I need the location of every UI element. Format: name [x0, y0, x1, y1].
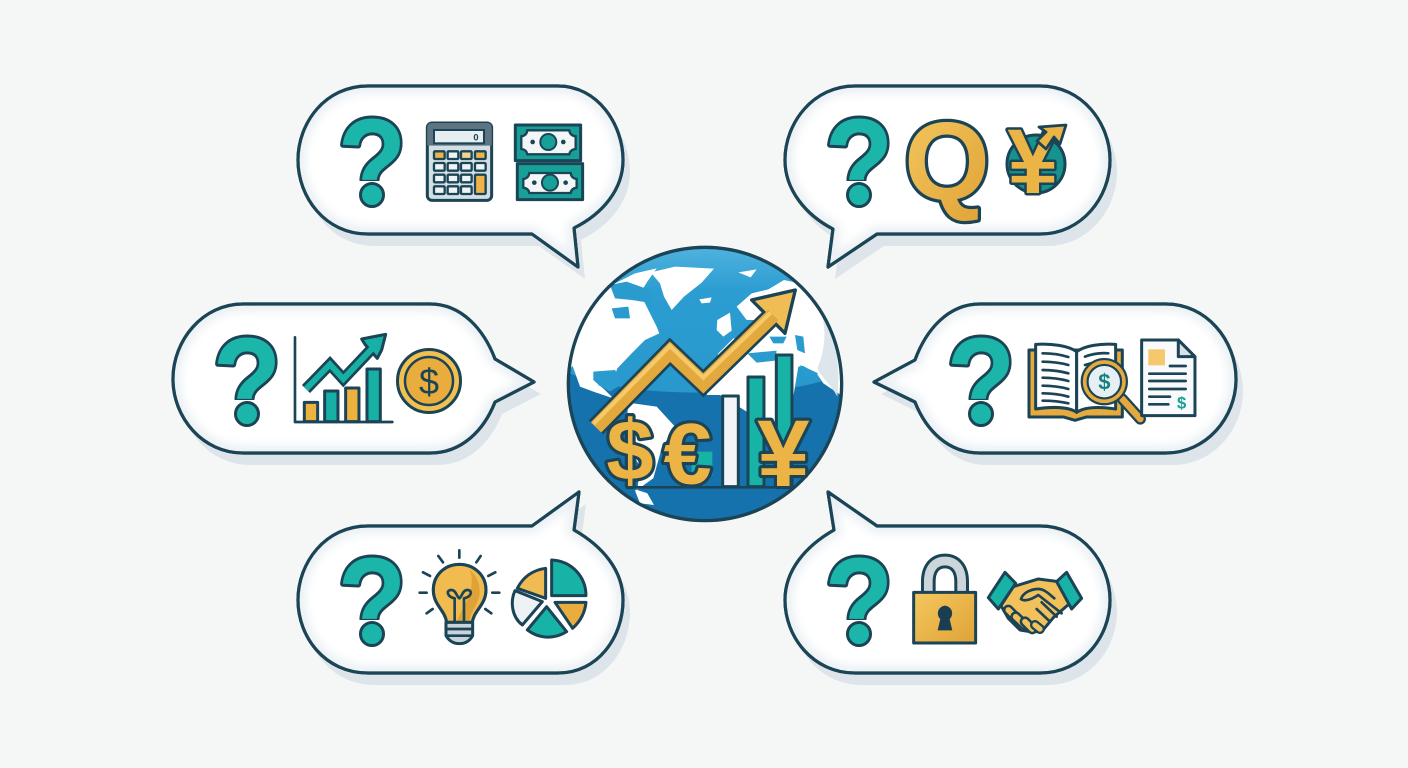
icon: magnifying glass with dollar [1085, 362, 1140, 419]
icon: open book [1029, 344, 1122, 420]
question mark [340, 116, 403, 208]
icon: document [1142, 340, 1195, 416]
panel: speech bubble with book and document [874, 304, 1243, 465]
question mark: ? [825, 533, 893, 672]
icon: calculator: 0 [473, 133, 479, 143]
icon: banknotes [515, 125, 583, 200]
globe [565, 247, 847, 527]
central globe with finance chart: ¥ [757, 401, 810, 506]
bars [723, 396, 738, 487]
question mark: ? [947, 313, 1015, 452]
panel: speech bubble with padlock and handshake [785, 492, 1117, 685]
question mark [827, 554, 890, 647]
question mark: ? [338, 533, 406, 672]
icon: pie chart [512, 560, 586, 637]
panel: speech bubble with growth chart and coin [173, 304, 541, 465]
icon: dollar coin: $ [419, 361, 439, 402]
question mark: ? [338, 94, 406, 233]
central globe with finance chart [565, 247, 847, 527]
icon: handshake [988, 572, 1082, 632]
icon: magnifying glass with dollar: $ [1098, 369, 1110, 394]
question mark [215, 334, 278, 427]
question mark [949, 334, 1012, 427]
icon: dollar coin [398, 350, 460, 412]
icon: calculator [427, 123, 492, 200]
central globe with finance chart: € [664, 406, 712, 502]
question mark: ? [213, 313, 281, 452]
question mark [340, 554, 403, 647]
panel: speech bubble with Q and yen [785, 86, 1117, 279]
arrow: rising trend [593, 290, 795, 427]
question mark: ? [825, 94, 893, 233]
icon: lightbulb [420, 550, 499, 644]
icon: document: $ [1177, 393, 1187, 412]
continents [565, 267, 843, 505]
panel: speech bubble with lightbulb and pie chart [298, 492, 630, 685]
icon: padlock [914, 561, 976, 643]
icon: bar chart with arrow [295, 334, 392, 422]
panel: speech bubble with calculator and banknotes [298, 86, 630, 279]
icon: yen coin with arrow: ¥ [1007, 111, 1059, 213]
icon: letter Q: Q [904, 100, 990, 223]
question mark [827, 116, 890, 208]
currency symbols: $ [606, 403, 654, 498]
